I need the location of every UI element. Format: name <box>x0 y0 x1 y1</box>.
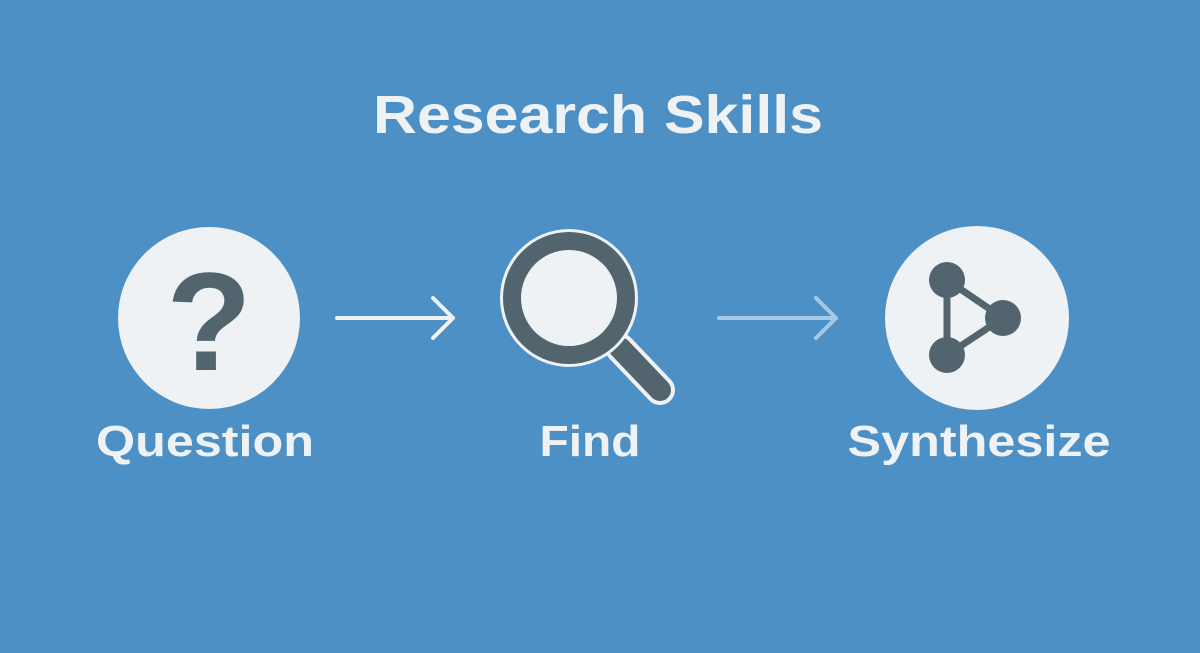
label: find: Find <box>540 417 640 466</box>
icon: network <box>885 226 1069 410</box>
label: question: Question <box>96 417 314 466</box>
step: question <box>96 227 314 466</box>
title: Research Skills <box>373 85 823 145</box>
icon: question circle: ? <box>166 243 252 400</box>
step: find <box>500 229 660 466</box>
icon: question circle <box>118 227 300 409</box>
arrow 2 <box>719 298 836 338</box>
step: synthesize <box>848 226 1110 466</box>
arrow 1 <box>337 298 453 338</box>
label: synthesize: Synthesize <box>848 417 1110 466</box>
icon: magnifier <box>500 229 660 390</box>
